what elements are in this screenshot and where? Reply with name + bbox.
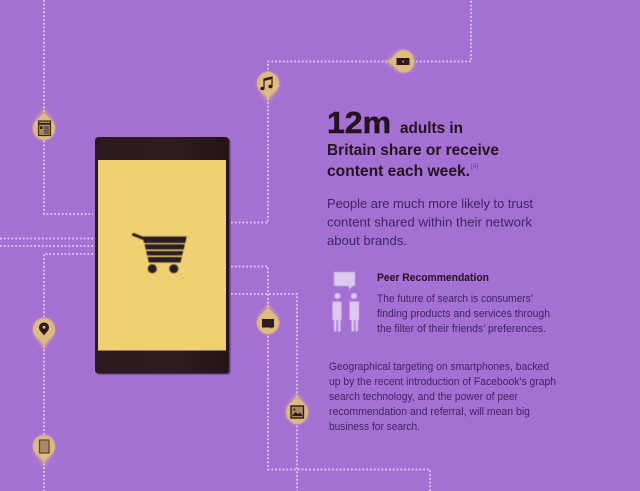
phone shadow — [96, 138, 230, 374]
intro paragraph: People are much more likely to trust — [327, 196, 533, 211]
icon: tablet document — [40, 440, 49, 453]
geographical targeting paragraph: up by the recent introduction of Facebook’s graph — [329, 376, 556, 388]
intro paragraph — [327, 196, 533, 248]
headline line 1: adults in — [400, 120, 463, 137]
geographical targeting paragraph: Geographical targeting on smartphones, backed — [329, 361, 549, 373]
phone screen — [98, 160, 226, 350]
icon: map marker — [39, 322, 49, 336]
pin: image — [286, 390, 308, 424]
geographical targeting paragraph: business for search. — [329, 421, 420, 433]
subheading: Peer Recommendation — [377, 272, 489, 284]
icon: shopping cart — [134, 234, 187, 273]
headline line 3: content each week. — [327, 163, 470, 180]
phone — [95, 137, 230, 374]
pin: chat — [257, 301, 279, 334]
geographical targeting paragraph: recommendation and referral, will mean big — [329, 406, 530, 418]
person left — [332, 293, 342, 332]
phone body — [95, 137, 229, 374]
footnote mark: [4] — [471, 164, 478, 170]
icon: picture — [291, 406, 304, 418]
intro paragraph: content shared within their network — [327, 214, 533, 230]
speech bubble — [334, 272, 355, 290]
headline line 2: Britain share or receive — [327, 142, 499, 159]
peer recommendation text — [377, 272, 550, 335]
pin: news article — [33, 106, 55, 140]
icon: peer recommendation — [332, 272, 359, 332]
geographical targeting paragraph — [329, 361, 556, 433]
intro paragraph: about brands. — [327, 233, 407, 248]
icon: music note — [260, 77, 273, 90]
peer recommendation text: finding products and services through — [377, 308, 550, 320]
dotted connector lines — [0, 0, 471, 491]
big number: 12m — [327, 105, 391, 140]
peer recommendation text: the filter of their friends’ preferences. — [377, 323, 546, 335]
person right — [350, 293, 359, 332]
headline — [327, 105, 499, 180]
pin: tablet — [33, 435, 55, 469]
icon: chat bubble — [262, 319, 274, 329]
pin: video — [382, 50, 415, 73]
icon: newspaper — [38, 121, 50, 136]
geographical targeting paragraph: search technology, and the power of peer — [329, 391, 518, 403]
icon: video player — [396, 58, 410, 65]
pin: music — [257, 72, 279, 105]
peer recommendation text: The future of search is consumers’ — [377, 293, 533, 305]
pin: location — [33, 318, 55, 352]
